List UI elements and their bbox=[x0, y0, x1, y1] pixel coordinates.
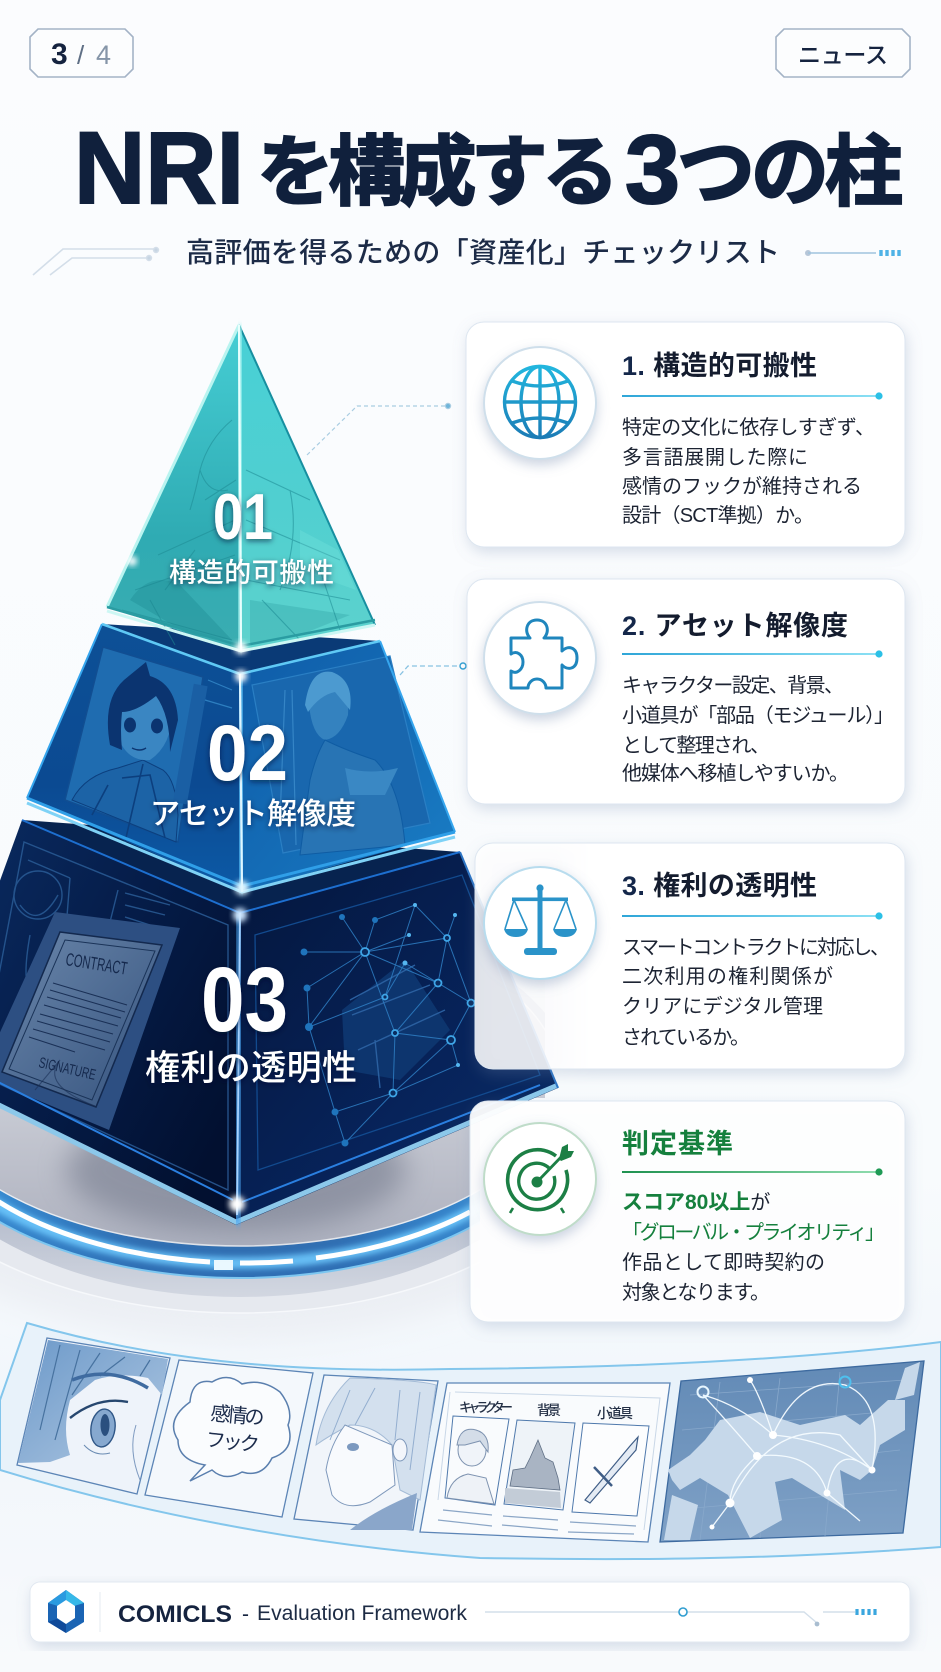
card 3: rights transparency: 3. 権利の透明性 bbox=[622, 871, 817, 901]
connector 2 bbox=[400, 663, 466, 675]
tier labels bbox=[145, 480, 357, 1088]
tier labels: 02 bbox=[207, 708, 288, 797]
pyramid tier 1: structural portability bbox=[107, 325, 375, 654]
subtitle decoration right bbox=[805, 250, 899, 256]
panel: character, background, prop sheet: 小道具 bbox=[597, 1406, 633, 1421]
title: 3 bbox=[625, 115, 680, 224]
platform disc bbox=[0, 1094, 545, 1321]
card 3: rights transparency: されているか。 bbox=[622, 1027, 750, 1049]
panel: boy in profile bbox=[294, 1375, 438, 1530]
manga film strip bbox=[0, 1323, 941, 1559]
panel: speech bubble: フック bbox=[204, 1428, 261, 1457]
card 1: structural portability: 1. 構造的可搬性 bbox=[622, 351, 817, 381]
footer bar: Evaluation Framework bbox=[257, 1602, 467, 1625]
page counter badge bbox=[30, 29, 133, 77]
card 3: rights transparency bbox=[475, 843, 905, 1069]
subtitle decoration left bbox=[33, 248, 158, 275]
card 2: asset resolution: キャラクター設定、背景、 bbox=[622, 674, 844, 697]
tier labels: アセット解像度 bbox=[150, 798, 356, 831]
footer circuit decoration bbox=[485, 1608, 875, 1626]
tier 3 edges bbox=[0, 820, 558, 1225]
panel: speech bubble bbox=[145, 1360, 313, 1517]
footer bar bbox=[30, 1582, 910, 1642]
connector 1 bbox=[307, 403, 451, 455]
card 2: asset resolution: 小道具が「部品（モジュール）」 bbox=[622, 704, 894, 727]
card 1: structural portability: 設計（SCT準拠）か。 bbox=[622, 504, 814, 527]
card 2: asset resolution: として整理され、 bbox=[622, 734, 770, 757]
pyramid tier 2: asset resolution bbox=[27, 624, 455, 895]
contract document: CONTRACT bbox=[64, 949, 129, 979]
card 4: judgement criteria: 「グローバル・プライオリティ」 bbox=[622, 1221, 885, 1244]
contract document: SIGNATURE bbox=[37, 1054, 97, 1084]
tier labels: 権利の透明性 bbox=[145, 1049, 357, 1088]
tier 2 edges bbox=[27, 624, 455, 895]
tier labels: 構造的可搬性 bbox=[169, 558, 334, 588]
icon: globe bbox=[484, 347, 596, 459]
page counter badge: 4 bbox=[96, 40, 111, 70]
title: つの柱 bbox=[677, 128, 903, 216]
category badge bbox=[776, 29, 910, 77]
subtitle: 高評価を得るための「資産化」チェックリスト bbox=[186, 237, 780, 268]
icon: COMICLS logo bbox=[48, 1590, 84, 1633]
title: を構成する bbox=[257, 130, 619, 216]
footer bar: - bbox=[242, 1603, 249, 1626]
card 2: asset resolution: 2. アセット解像度 bbox=[622, 611, 848, 641]
page counter badge: 3 bbox=[51, 38, 68, 71]
card 4: judgement criteria bbox=[470, 1101, 905, 1322]
panel: world map network bbox=[660, 1361, 924, 1542]
card 3: rights transparency: 二次利用の権利関係が bbox=[622, 965, 833, 988]
card 3: rights transparency: スマートコントラクトに対応し、 bbox=[622, 936, 890, 959]
card 4: judgement criteria: スコア80以上が bbox=[622, 1191, 770, 1214]
card 3: rights transparency: クリアにデジタル管理 bbox=[622, 995, 823, 1018]
panel: character, background, prop sheet: キャラクター bbox=[459, 1400, 513, 1415]
card 4: judgement criteria: 作品として即時契約の bbox=[622, 1251, 825, 1274]
card 1: structural portability: 感情のフックが維持される bbox=[622, 475, 862, 498]
panel: character, background, prop sheet bbox=[420, 1383, 670, 1542]
manga panel: boy in profile bbox=[252, 656, 430, 855]
etched manga panels bbox=[122, 420, 350, 645]
card 1: structural portability: 特定の文化に依存しすぎず、 bbox=[622, 416, 875, 439]
tier labels: 01 bbox=[213, 480, 273, 553]
title: NRI bbox=[74, 111, 244, 225]
page counter badge: / bbox=[77, 40, 85, 70]
tier 1 edges bbox=[107, 325, 375, 654]
pyramid tier 3: rights transparency bbox=[0, 820, 558, 1225]
blockchain network bbox=[255, 875, 540, 1170]
strip frame bbox=[0, 1323, 941, 1559]
footer bar: COMICLS bbox=[118, 1601, 232, 1628]
card 4: judgement criteria: 対象となります。 bbox=[622, 1281, 770, 1304]
card 2: asset resolution: 他媒体へ移植しやすいか。 bbox=[622, 762, 849, 785]
title bbox=[74, 111, 903, 225]
icon: balance scale bbox=[484, 867, 596, 979]
card 4: judgement criteria: 判定基準 bbox=[622, 1129, 733, 1159]
category badge: ニュース bbox=[798, 42, 888, 68]
card 1: structural portability bbox=[466, 322, 905, 547]
panel: eye close-up bbox=[17, 1338, 170, 1494]
contract document bbox=[0, 912, 180, 1130]
icon: target with arrow bbox=[484, 1123, 596, 1235]
card 1: structural portability: 多言語展開した際に bbox=[622, 446, 808, 469]
panel: character, background, prop sheet: 背景 bbox=[537, 1402, 561, 1418]
manga panel: boy facing front bbox=[65, 647, 232, 842]
manga sheet behind contract bbox=[0, 842, 228, 1190]
icon: puzzle piece bbox=[484, 602, 596, 714]
card 2: asset resolution bbox=[467, 579, 905, 804]
panel: speech bubble: 感情の bbox=[210, 1402, 265, 1430]
tier labels: 03 bbox=[201, 949, 288, 1051]
